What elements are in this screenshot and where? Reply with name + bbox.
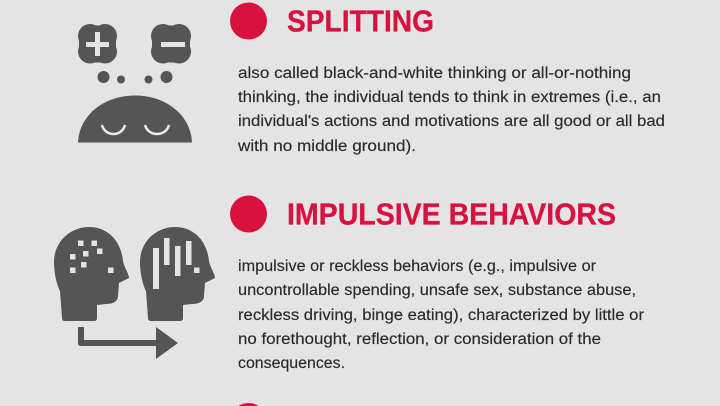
text block: impulsive behaviors description: [238, 258, 644, 372]
text block: impulsive behaviors description: reckless driving, binge eating), characterized by little or: [238, 307, 644, 324]
icon: two heads with arrow: [54, 227, 215, 359]
icon: red bullet for splitting: [230, 2, 267, 40]
text block: splitting description: individual's actions and motivations are all good or all bad: [238, 113, 665, 130]
text block: splitting description: also called black-and-white thinking or all-or-nothing: [238, 65, 631, 82]
text block: impulsive behaviors description: uncontrollable spending, unsafe sex, substance abuse,: [238, 282, 636, 299]
text block: impulsive behaviors description: no forethought, reflection, or consideration of the: [238, 331, 601, 348]
icon: partially visible red bullet: [238, 403, 259, 406]
icon: thinking face with plus and minus thoughts: [78, 24, 192, 142]
text block: splitting description: [237, 65, 665, 155]
heading: splitting: SPLITTING: [287, 4, 434, 38]
heading: impulsive behaviors: IMPULSIVE BEHAVIORS: [287, 196, 616, 232]
text block: impulsive behaviors description: impulsive or reckless behaviors (e.g., impulsive or: [238, 258, 596, 275]
text block: impulsive behaviors description: consequences.: [238, 355, 345, 372]
text block: splitting description: with no middle ground).: [237, 138, 416, 155]
text block: splitting description: thinking, the individual tends to think in extremes (i.e., an: [238, 89, 661, 106]
icon: red bullet for impulsive behaviors: [230, 196, 267, 232]
